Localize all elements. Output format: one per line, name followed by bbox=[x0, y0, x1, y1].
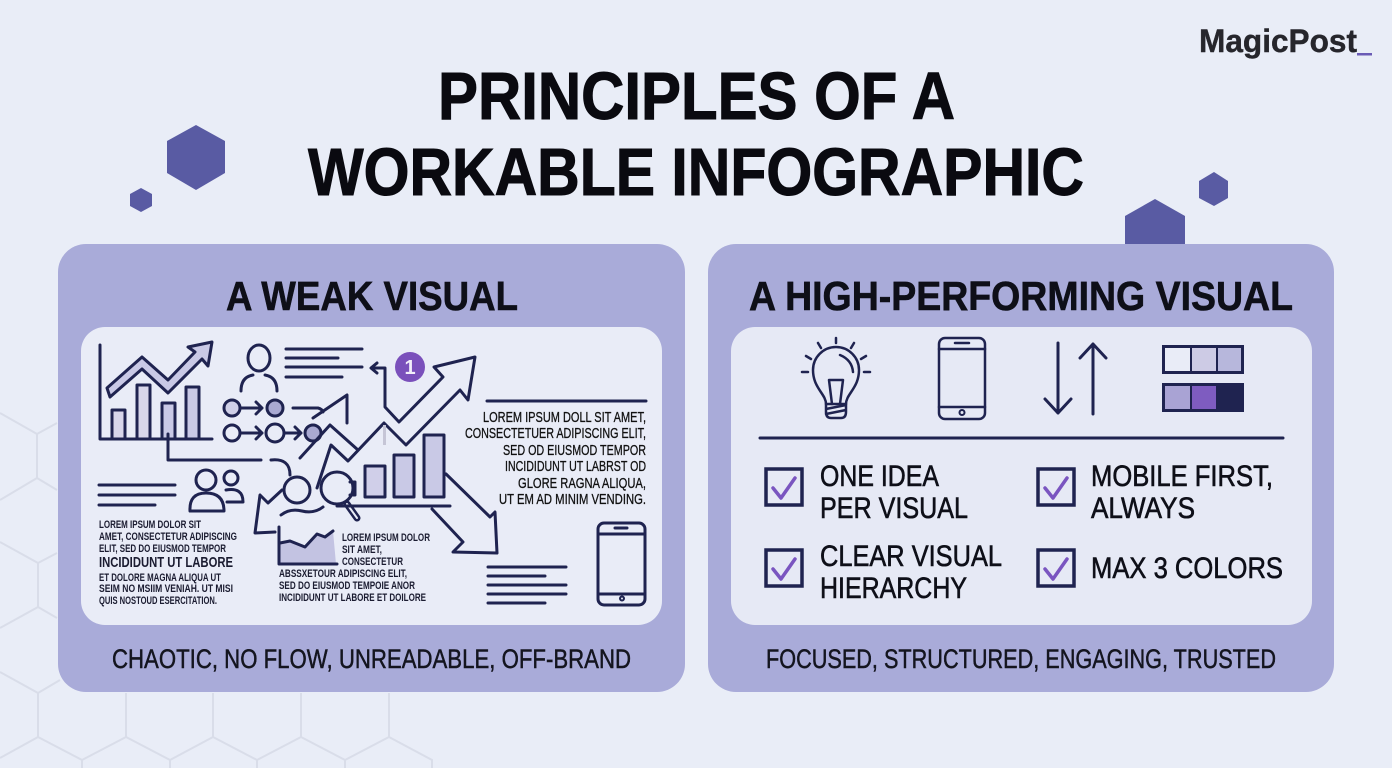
icon: area chart bbox=[279, 527, 337, 564]
middle lorem ipsum block: ABSSXETOUR ADIPISCING ELIT, bbox=[279, 568, 407, 580]
left lorem ipsum block: ET DOLORE MAGNA ALIQUA UT bbox=[99, 572, 221, 584]
chaotic content card bbox=[81, 327, 662, 625]
connector line bbox=[168, 434, 290, 475]
checklist item: max 3 colors: MAX 3 COLORS bbox=[1091, 552, 1283, 585]
decorative hexagon: large left bbox=[167, 125, 225, 190]
checklist item: clear visual hierarchy bbox=[766, 540, 1002, 605]
caption: weak visual: CHAOTIC, NO FLOW, UNREADABLE, OFF-BRAND bbox=[112, 644, 631, 674]
icon: users bbox=[190, 470, 243, 511]
icon: broken arrow pointing left bbox=[255, 490, 282, 533]
icon: bars with baseline bbox=[337, 435, 450, 506]
icon: process flow nodes bbox=[224, 395, 347, 442]
checklist item: mobile first: ALWAYS bbox=[1091, 492, 1195, 525]
left lorem ipsum block bbox=[99, 519, 237, 607]
icon: central person bbox=[281, 477, 323, 515]
right lorem ipsum block: GLORE RAGNA ALIQUA, bbox=[518, 475, 646, 492]
text lines: lower right bbox=[488, 567, 566, 603]
divider bbox=[760, 436, 1283, 440]
right lorem ipsum block bbox=[465, 401, 646, 508]
middle lorem ipsum block: LOREM IPSUM DOLOR bbox=[342, 532, 430, 544]
right lorem ipsum block: LOREM IPSUM DOLL SIT AMET, bbox=[483, 409, 646, 426]
icon: arrow pointing down right bbox=[432, 474, 497, 553]
icon: person with text lines bbox=[241, 345, 362, 391]
left lorem ipsum block: LOREM IPSUM DOLOR SIT bbox=[99, 519, 201, 531]
right lorem ipsum block: UT EM AD MINIM VENDING. bbox=[499, 491, 646, 508]
focused content card bbox=[731, 327, 1312, 625]
right lorem ipsum block: INCIDIDUNT UT LABRST OD bbox=[505, 458, 646, 475]
checklist item: clear visual hierarchy: HIERARCHY bbox=[820, 572, 967, 605]
text lines: left cluster bbox=[99, 485, 175, 505]
number badge: 1 bbox=[404, 357, 416, 379]
panel: a weak visual bbox=[58, 244, 685, 692]
checklist item: one idea per visual: PER VISUAL bbox=[820, 492, 968, 525]
left lorem ipsum block: AMET, CONSECTETUR ADIPISCING bbox=[99, 531, 237, 543]
heading: a weak visual: A WEAK VISUAL bbox=[226, 273, 518, 319]
checklist item: mobile first: MOBILE FIRST, bbox=[1091, 460, 1273, 493]
checklist item: one idea per visual: ONE IDEA bbox=[820, 460, 939, 493]
icon: smartphone bbox=[939, 338, 985, 419]
left lorem ipsum block: ELIT, SED DO EIUSMOD TEMPOR bbox=[99, 543, 226, 555]
icon: colour swatches bbox=[1162, 345, 1244, 412]
icon: phone small bbox=[598, 523, 645, 605]
caption: high-performing visual: FOCUSED, STRUCTURED, ENGAGING, TRUSTED bbox=[766, 644, 1276, 674]
icon: magnifying glass bbox=[321, 472, 357, 518]
right lorem ipsum block: CONSECTETUER ADIPISCING ELIT, bbox=[465, 425, 646, 442]
left lorem ipsum block: QUIS NOSTOUD ESERCITATION. bbox=[99, 595, 217, 607]
panel: a high-performing visual bbox=[708, 244, 1334, 692]
decorative hexagon: behind right panel bbox=[1125, 199, 1185, 246]
decorative hexagon: small left bbox=[130, 188, 152, 212]
left lorem ipsum block: SEIM NO MSIIM VENIAH. UT MISI bbox=[99, 583, 233, 595]
right lorem ipsum block: SED OD EIUSMOD TEMPOR bbox=[503, 442, 646, 459]
icon: hierarchy arrows bbox=[1045, 343, 1106, 414]
middle lorem ipsum block: CONSECTETUR bbox=[342, 556, 403, 568]
logo: MagicPost bbox=[1199, 23, 1357, 59]
checklist item: mobile first bbox=[1038, 460, 1273, 525]
middle lorem ipsum block: SED DO EIUSMOD TEMPOIE ANOR bbox=[279, 580, 415, 592]
title bbox=[308, 59, 1084, 210]
title: WORKABLE INFOGRAPHIC bbox=[308, 135, 1084, 210]
title: PRINCIPLES OF A bbox=[438, 59, 955, 134]
middle lorem ipsum block bbox=[279, 532, 430, 604]
checklist item: max 3 colors bbox=[1038, 550, 1283, 586]
number badge bbox=[395, 352, 425, 382]
icon: bar chart with rising arrow bbox=[100, 342, 212, 439]
icon: large zigzag arrows bbox=[300, 357, 475, 488]
heading: high-performing visual: A HIGH-PERFORMING VISUAL bbox=[749, 273, 1293, 319]
middle lorem ipsum block: SIT AMET, bbox=[342, 544, 382, 556]
checklist item: one idea per visual bbox=[766, 460, 968, 525]
checklist item: clear visual hierarchy: CLEAR VISUAL bbox=[820, 540, 1002, 573]
left lorem ipsum block: INCIDIDUNT UT LABORE bbox=[99, 554, 233, 571]
icon: light bulb bbox=[802, 338, 870, 418]
middle lorem ipsum block: INCIDIDUNT UT LABORE ET DOILORE bbox=[279, 592, 426, 604]
decorative hexagon: small right bbox=[1199, 172, 1228, 206]
